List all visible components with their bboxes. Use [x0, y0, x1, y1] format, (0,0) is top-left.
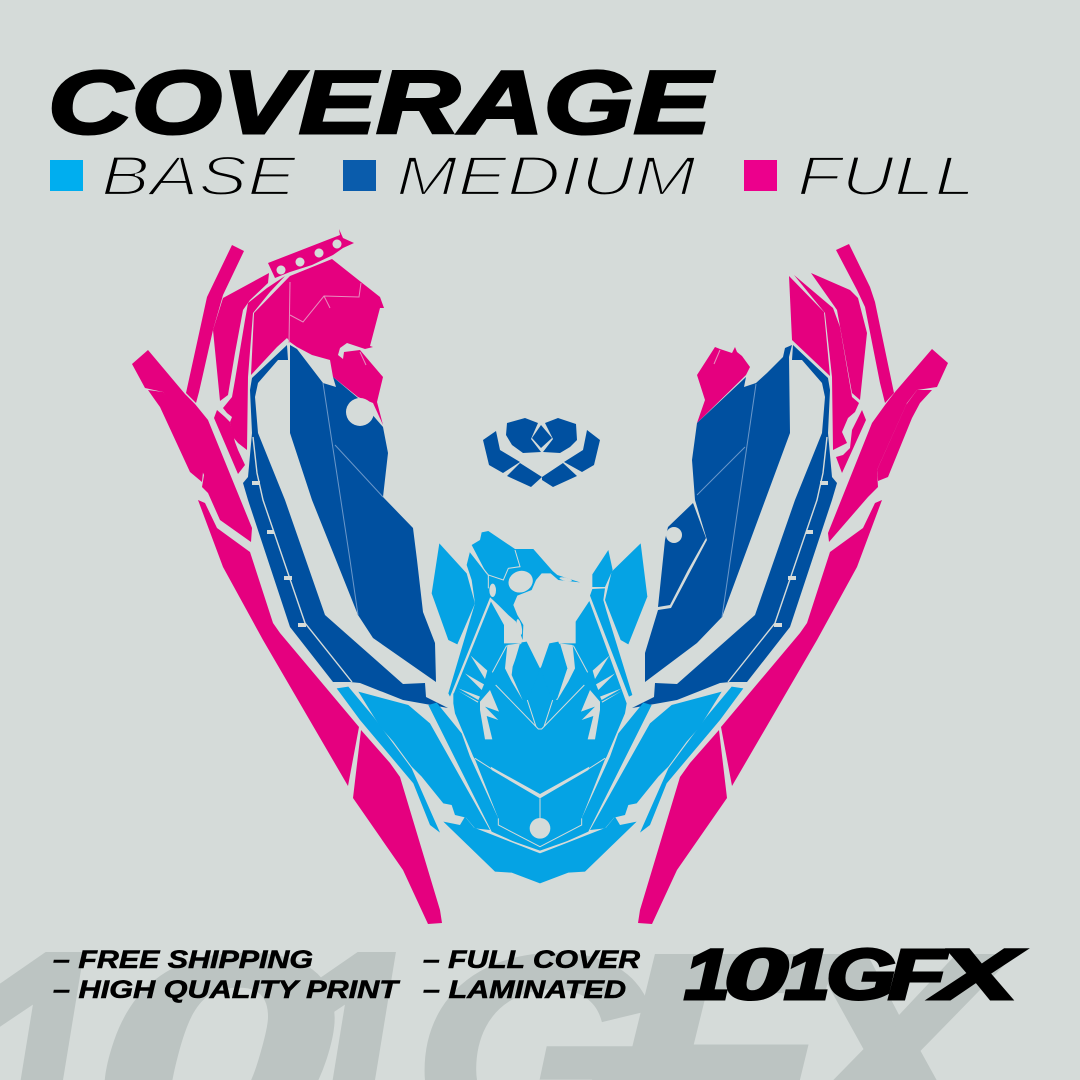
legend label: medium: MEDIUM: [396, 144, 696, 207]
medium hood panel: right: [645, 345, 792, 682]
feature list: left column: – FREE SHIPPING: [53, 946, 313, 974]
brand logo: G: [826, 936, 896, 1015]
medium band: left: [243, 345, 448, 708]
full coverage lower strips: left: [198, 500, 442, 924]
legend: [50, 144, 975, 207]
nose seam lines: [453, 550, 628, 847]
full coverage panels: left: [132, 229, 384, 542]
brand logo: 1: [684, 936, 730, 1015]
full coverage lower strips: right: [638, 500, 882, 924]
base coverage wings: [337, 687, 743, 833]
feature list: left column: – HIGH QUALITY PRINT: [53, 976, 401, 1004]
brand logo: X: [929, 936, 1024, 1015]
feature list: right column: – FULL COVER: [423, 946, 640, 974]
legend swatch: full: [744, 160, 777, 191]
nose cut-outs: [474, 567, 606, 853]
feature list: right column: [423, 946, 640, 1004]
panel seam lines on full: [289, 282, 720, 365]
vent cut-out: [346, 398, 374, 426]
hood slashes: left: [458, 656, 499, 739]
brand logo: 0: [724, 936, 788, 1015]
legend label: full: FULL: [797, 144, 975, 207]
nose body: [453, 601, 627, 853]
feature list: left column: [53, 946, 401, 1004]
base coverage centre: [432, 531, 647, 883]
centre leaves: [512, 642, 567, 728]
vent cut-out: [666, 527, 682, 543]
base front lip: [443, 817, 637, 883]
feature list: right column: – LAMINATED: [423, 976, 626, 1004]
medium emblem: [483, 418, 600, 487]
base shields and upper pieces: [432, 543, 647, 697]
medium coverage side bands: [243, 345, 837, 708]
brand logo: [684, 936, 1024, 1015]
brand logo: 1: [784, 936, 830, 1015]
base nose top piece: [472, 531, 580, 640]
base wings: left: [337, 687, 498, 833]
full coverage panels: right: [697, 244, 948, 542]
base wings: right: [582, 687, 743, 833]
title: COVERAGE: [48, 52, 714, 152]
hood slashes: right: [581, 656, 622, 739]
medium hood panel: left: [290, 345, 436, 682]
brand logo: F: [888, 936, 948, 1015]
legend swatch: medium: [343, 160, 376, 191]
legend label: base: BASE: [101, 144, 297, 207]
legend swatch: base: [50, 160, 83, 191]
medium band: right: [632, 345, 837, 708]
medium band seams and tabs: [252, 437, 828, 682]
